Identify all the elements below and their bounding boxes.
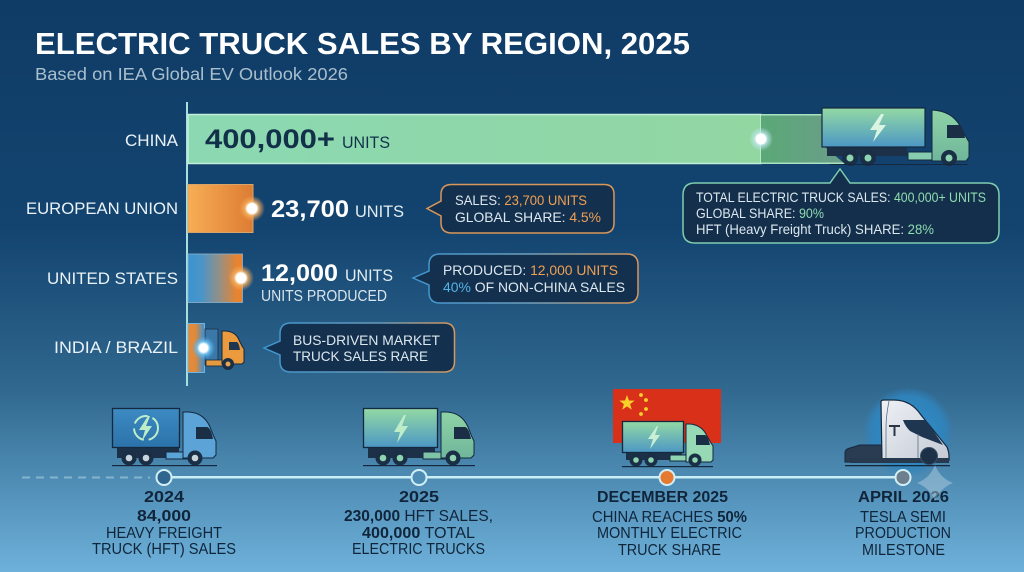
text: 2025: 400,000 TOTAL <box>362 525 475 542</box>
callout: United States <box>413 254 638 303</box>
callout: European Union: SALES: 23,700 UNITS <box>455 193 587 208</box>
text: 2024: TRUCK (HFT) SALES <box>92 541 236 558</box>
callout: United States: 40% OF NON-CHINA SALES <box>443 280 625 295</box>
callout: India / Brazil: TRUCK SALES RARE <box>293 349 428 364</box>
text: April 2026 <box>855 489 951 559</box>
bar: United States <box>188 254 254 302</box>
value: United States: 12,000 <box>261 260 338 287</box>
text: 2024: HEAVY FREIGHT <box>106 525 222 542</box>
label: India / Brazil: INDIA / BRAZIL <box>54 338 178 357</box>
text: April 2026: MILESTONE <box>862 542 945 559</box>
bar: India / Brazil <box>188 324 218 372</box>
bar: European Union <box>188 184 265 232</box>
value: European Union: 23,700 <box>271 196 349 223</box>
bar chart: sales by region <box>26 102 999 386</box>
row: United States <box>47 254 638 305</box>
callout: China: TOTAL ELECTRIC TRUCK SALES: 400,000+ UNITS <box>696 190 986 205</box>
text: April 2026: APRIL 2026 <box>858 489 949 506</box>
text: 2024: 2024 <box>144 489 184 506</box>
callout: United States: PRODUCED: 12,000 UNITS <box>443 263 618 278</box>
callout: European Union: GLOBAL SHARE: 4.5% <box>455 210 601 225</box>
value: China: UNITS <box>342 133 390 152</box>
callout: China: GLOBAL SHARE: 90% <box>696 206 824 221</box>
value: China <box>205 124 390 154</box>
icon: Tesla Semi <box>845 387 953 477</box>
marker: India / Brazil <box>192 336 216 360</box>
callout: China: HFT (Heavy Freight Truck) SHARE: 28% <box>696 222 934 237</box>
title: ELECTRIC TRUCK SALES BY REGION, 2025 <box>35 27 690 61</box>
bar: China <box>188 114 845 164</box>
icon: green electric truck <box>822 108 969 166</box>
icon: orange truck <box>206 331 244 370</box>
row: China <box>125 108 999 243</box>
node: 2025 <box>412 470 426 485</box>
label: European Union: EUROPEAN UNION <box>26 199 178 218</box>
node: December 2025 <box>660 470 674 485</box>
text: 2025 <box>344 489 493 558</box>
sparkle mark <box>917 465 953 501</box>
callout: India / Brazil: BUS-DRIVEN MARKET <box>293 333 441 348</box>
timeline line <box>172 476 896 478</box>
value: United States: UNITS <box>345 266 393 285</box>
timeline <box>22 387 953 559</box>
callout: China <box>683 169 999 243</box>
node: 2024 <box>156 470 172 485</box>
milestone: 2024 <box>92 408 236 558</box>
text: December 2025: DECEMBER 2025 <box>597 489 728 506</box>
text: April 2026: TESLA SEMI <box>860 509 946 526</box>
callout: India / Brazil <box>264 323 454 372</box>
text: 2024: 84,000 <box>137 508 191 525</box>
subtitle: Based on IEA Global EV Outlook 2026 <box>35 64 348 84</box>
milestone: December 2025 <box>592 389 747 559</box>
node: April 2026 <box>896 470 910 485</box>
icon: blue electric truck <box>112 408 217 466</box>
value: European Union <box>271 196 404 223</box>
label: China: CHINA <box>125 131 179 150</box>
text: December 2025: TRUCK SHARE <box>618 542 721 559</box>
row: European Union <box>26 184 614 233</box>
axis line <box>186 102 188 386</box>
timeline dashed lead-in <box>22 476 150 478</box>
icon: green electric truck <box>363 408 475 466</box>
label: United States: UNITED STATES <box>47 269 178 288</box>
text: April 2026: PRODUCTION <box>855 525 951 542</box>
sublabel: units produced: UNITS PRODUCED <box>261 288 387 305</box>
value: United States <box>261 260 393 287</box>
text: December 2025 <box>592 489 747 559</box>
text: December 2025: CHINA REACHES 50% <box>592 509 747 526</box>
milestone: 2025 <box>344 408 493 558</box>
text: 2025: 230,000 HFT SALES, <box>344 508 493 525</box>
text: 2024 <box>92 489 236 558</box>
callout: European Union <box>427 184 614 233</box>
icon: China flag <box>613 389 721 443</box>
value: European Union: UNITS <box>355 202 404 221</box>
milestone: April 2026 <box>845 387 953 559</box>
icon: green electric truck <box>622 422 713 467</box>
row: India / Brazil <box>54 323 454 372</box>
value: China: 400,000+ <box>205 124 335 154</box>
text: December 2025: MONTHLY ELECTRIC <box>597 525 742 542</box>
text: 2025: 2025 <box>399 489 439 506</box>
text: 2025: ELECTRIC TRUCKS <box>352 541 485 558</box>
